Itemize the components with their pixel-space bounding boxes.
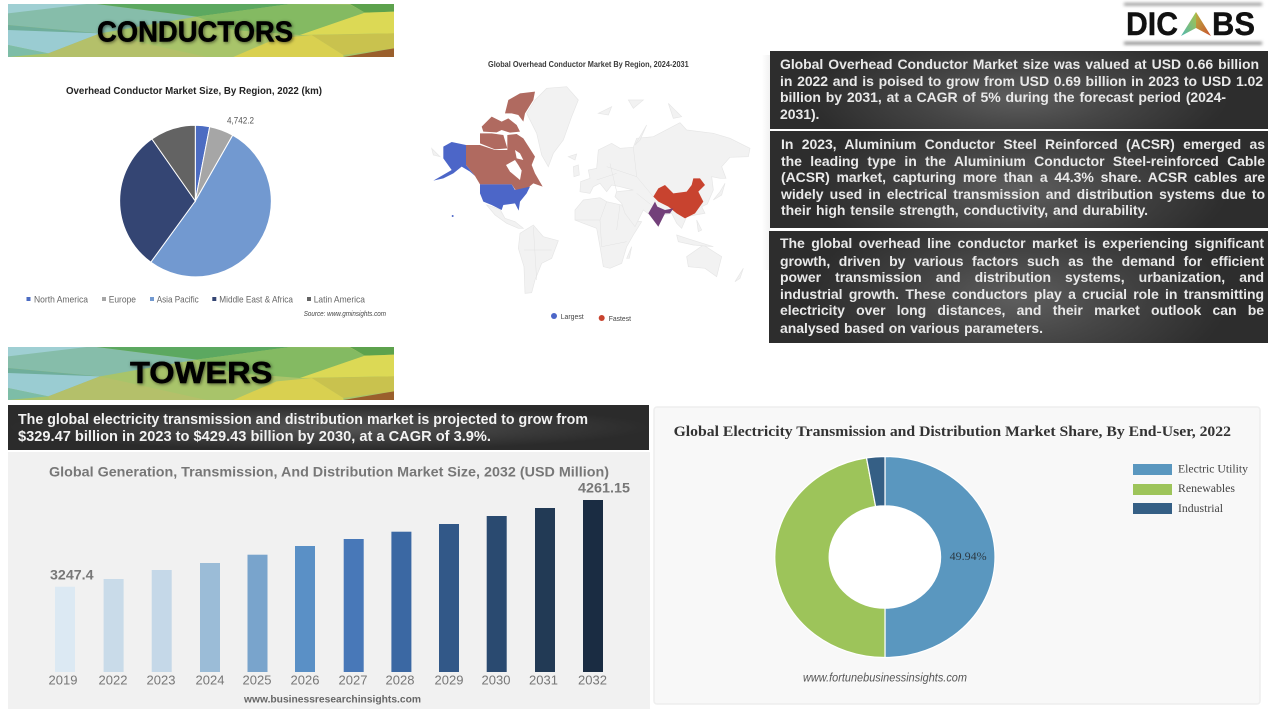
logo: Dicabs xyxy=(1124,3,1262,44)
India xyxy=(648,202,673,227)
text panel: market size xyxy=(770,51,1268,129)
year axis labels: 2023 xyxy=(147,672,175,688)
text panel: market growth drivers: growth, driven by various factors such as the demand for efficient xyxy=(780,253,1264,269)
bars xyxy=(55,500,603,672)
pie chart source: Source: www.gminsights.com xyxy=(304,311,386,318)
text panel: market size: Global Overhead Conductor Market size was valued at USD 0.66 billion xyxy=(780,56,1259,72)
text panel: market growth drivers: The global overhead line conductor market is experiencing significant xyxy=(780,235,1264,251)
pie chart legend: Middle East & Africa xyxy=(219,294,294,306)
year axis labels: 2022 xyxy=(99,672,127,688)
year axis labels: 2032 xyxy=(578,672,607,688)
text panel: market size: billion by 2031, at a CAGR of 5% during the forecast period (2024- xyxy=(780,89,1226,105)
map legend: Fastest xyxy=(609,314,632,323)
donut legend: Industrial xyxy=(1178,503,1223,515)
year axis labels: 2025 xyxy=(243,672,271,688)
text panel: ACSR share: In 2023, Aluminium Conductor Steel Reinforced (ACSR) emerged as xyxy=(781,136,1265,152)
pie chart legend: Latin America xyxy=(314,294,366,306)
text panel: market size: in 2022 and is poised to grow from USD 0.69 billion in 2023 to USD 1.02 xyxy=(780,73,1263,89)
map shadow strip xyxy=(762,55,770,270)
bar chart source: www.businessresearchinsights.com xyxy=(243,694,421,706)
panel: donut chart: 49.94% xyxy=(950,549,987,563)
map legend: Largest xyxy=(561,312,585,321)
map title: Global Overhead Conductor Market By Region, 2024-2031 xyxy=(488,60,689,69)
text panel: ACSR share xyxy=(770,131,1268,228)
year axis labels: 2027 xyxy=(339,672,367,688)
text panel: market growth drivers: industrial growth. These conductors play a crucial role in transmitting xyxy=(780,286,1264,302)
donut xyxy=(775,456,995,658)
text panel: ACSR share: widely used in electrical transmission and distribution systems due to xyxy=(781,186,1265,202)
banner: towers xyxy=(8,347,394,400)
world map panel xyxy=(432,60,750,323)
donut legend xyxy=(1133,464,1248,515)
donut legend: Electric Utility xyxy=(1178,464,1248,476)
year axis labels: 2030 xyxy=(482,672,510,688)
bar chart title: Global Generation, Transmission, And Distribution Market Size, 2032 (USD Million) xyxy=(49,464,609,480)
value labels: 3247.4 xyxy=(50,568,94,582)
text panel: market growth drivers xyxy=(769,231,1268,343)
world map xyxy=(432,87,750,293)
panel: bar chart xyxy=(8,452,650,709)
text block: transmission and distribution market: The global electricity transmission and distribution market is projected to grow from xyxy=(18,411,588,428)
China xyxy=(653,178,705,218)
donut legend: Renewables xyxy=(1178,483,1236,495)
pie chart: overhead conductor market by region: 4,742.2 xyxy=(227,116,254,126)
value labels: 4261.15 xyxy=(578,480,631,496)
text panel: market growth drivers: electricity over long distances, and their market outlook can be xyxy=(780,302,1264,318)
map legend xyxy=(551,312,632,323)
banner: conductors xyxy=(8,4,394,57)
year axis labels: 2031 xyxy=(529,672,558,688)
year axis labels: 2029 xyxy=(435,672,463,688)
pie chart legend xyxy=(26,294,366,306)
pie chart title: Overhead Conductor Market Size, By Region, 2022 (km) xyxy=(66,85,322,97)
year axis labels: 2019 xyxy=(49,672,77,688)
donut title: Global Electricity Transmission and Distribution Market Share, By End-User, 2022 xyxy=(674,424,1231,440)
text block: transmission and distribution market xyxy=(8,405,649,450)
year axis labels: 2026 xyxy=(291,672,319,688)
year axis labels xyxy=(49,672,607,688)
logo: Dicabs: BS xyxy=(1212,6,1255,42)
pie chart: overhead conductor market by region xyxy=(66,85,322,277)
pie chart legend: Europe xyxy=(109,294,136,306)
year axis labels: 2028 xyxy=(386,672,414,688)
value labels xyxy=(50,480,631,582)
pie chart legend: Asia Pacific xyxy=(157,294,199,306)
logo: Dicabs: DIC xyxy=(1126,6,1178,42)
text panel: ACSR share: (ACSR) market, capturing more than a 44.3% share. ACSR cables are xyxy=(781,169,1265,185)
text panel: market growth drivers: power transmission and distribution systems, urbanization, and xyxy=(780,269,1264,285)
text panel: market growth drivers: analysed based on various parameters. xyxy=(780,320,1043,336)
pie chart legend: North America xyxy=(34,294,89,306)
text panel: market size: 2031). xyxy=(780,106,819,122)
text block: transmission and distribution market: $329.47 billion in 2023 to $429.43 billion by 2030, at a CAGR of 3.9%. xyxy=(18,428,491,445)
text panel: ACSR share: the leading type in the Aluminium Conductor Steel-reinforced Cable xyxy=(781,153,1265,169)
year axis labels: 2024 xyxy=(196,672,224,688)
donut source: www.fortunebusinessinsights.com xyxy=(803,672,967,684)
USA xyxy=(433,142,530,217)
text panel: ACSR share: their high tensile strength, conductivity, and durability. xyxy=(781,202,1148,218)
panel: donut chart xyxy=(654,407,1260,704)
banner: towers: TOWERS xyxy=(130,355,272,390)
banner: conductors: CONDUCTORS xyxy=(97,16,293,48)
Canada xyxy=(466,92,543,192)
